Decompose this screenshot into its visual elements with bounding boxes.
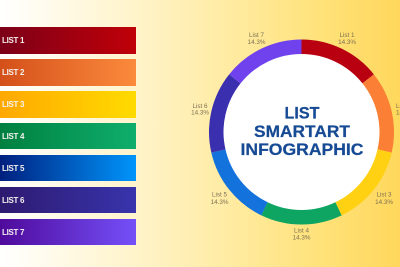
bar list 4: LIST 4 [2, 132, 24, 140]
bar list 6 [0, 186, 136, 213]
white centre circle [222, 52, 382, 212]
slice labels: 14.3% [248, 39, 266, 46]
bar list 6: LIST 6 [2, 196, 24, 204]
bar list 1 [0, 27, 136, 54]
slice labels: List 7 [249, 32, 265, 39]
slice labels: 14.3% [211, 199, 229, 206]
bar list 5: LIST 5 [2, 164, 24, 173]
bar list 2: LIST 2 [2, 68, 24, 77]
slice labels [191, 32, 400, 242]
slice labels: List 6 [192, 103, 208, 110]
slice labels: 14.3% [293, 234, 311, 242]
bar list 2 [0, 59, 136, 86]
centre title: INFOGRAPHIC [240, 140, 364, 159]
bar list 1: LIST 1 [2, 36, 24, 45]
bar list 7 [0, 218, 136, 245]
slice labels: List 4 [294, 228, 310, 234]
bar list 3: LIST 3 [2, 100, 24, 109]
slice labels: List 1 [339, 32, 355, 39]
bar list 3 [0, 91, 136, 118]
slice labels: List 5 [212, 192, 228, 198]
donut segments [216, 47, 387, 217]
bar list 7: LIST 7 [2, 228, 24, 236]
bar list 5 [0, 155, 136, 181]
slice labels: 14.3% [191, 110, 209, 116]
slice labels: 14.3% [375, 199, 393, 206]
slice labels: 14.3% [338, 39, 356, 46]
centre title: LIST [284, 104, 320, 122]
bar list 4 [0, 122, 136, 149]
centre title [240, 104, 364, 159]
slice labels: List 3 [376, 192, 392, 198]
centre title: SMARTART [254, 122, 351, 141]
